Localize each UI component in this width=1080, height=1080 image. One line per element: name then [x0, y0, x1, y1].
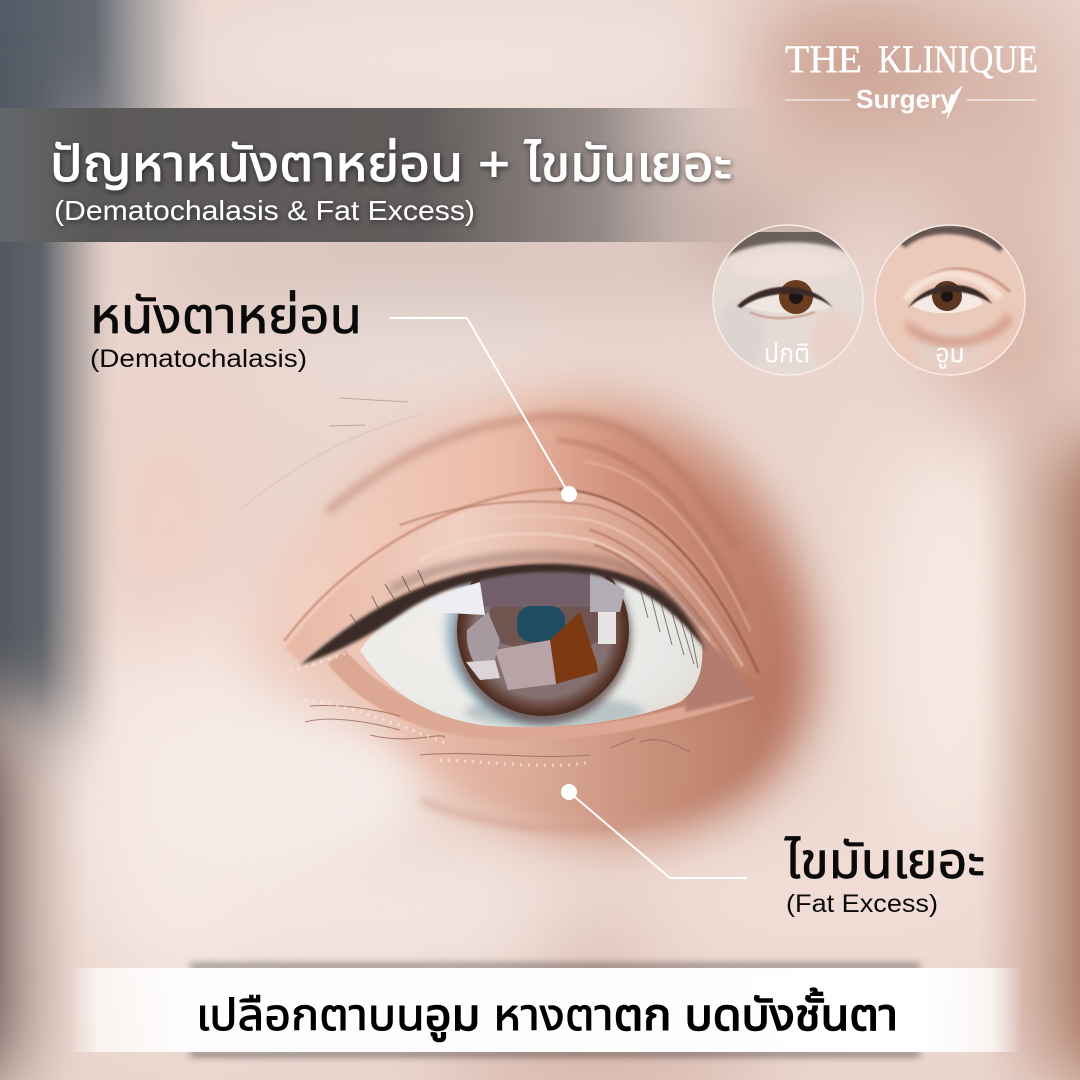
upper lash line [300, 564, 705, 665]
title band [0, 108, 770, 242]
circle: normal eye [713, 225, 863, 375]
brand logo: Surgery [856, 84, 956, 114]
brand logo: KLINIQUE [878, 38, 1038, 81]
drooping eyelid [285, 490, 756, 680]
label: dermatochalasis: หนังตาหย่อน [90, 288, 362, 344]
sclera [360, 565, 702, 727]
wrinkle lines on eyelid [240, 398, 758, 672]
label: fat excess: (Fat Excess) [786, 890, 938, 918]
lower lid rim [328, 650, 755, 740]
callout line: fat excess [561, 784, 747, 878]
bag crease [420, 800, 640, 829]
bottom summary band [70, 964, 1020, 1056]
brand logo [785, 38, 1038, 119]
main title: ปัญหาหนังตาหย่อน + ไขมันเยอะ [50, 136, 732, 192]
white skin speckles [290, 652, 590, 765]
label: baggy: อูม [936, 338, 964, 369]
summary text: เปลือกตาบน อูม หางตาตก บดบังชั้นตา [196, 988, 898, 1042]
caruncle [685, 625, 753, 712]
eye bag [340, 695, 765, 818]
main eye illustration [180, 392, 813, 860]
title subtitle: (Dematochalasis & Fat Excess) [54, 195, 475, 226]
iris and reflection [426, 564, 646, 727]
callout line: dermatochalasis [390, 318, 577, 502]
lower lid wrinkles [305, 705, 690, 756]
upper fold skin [290, 414, 770, 690]
soft lash shadow [390, 556, 700, 630]
soft rose halo around the eye [240, 392, 813, 839]
label: dermatochalasis: (Dematochalasis) [90, 345, 307, 373]
label: fat excess: ไขมันเยอะ [784, 833, 985, 889]
label: dermatochalasis [90, 288, 362, 373]
circle: baggy eye [875, 225, 1026, 376]
label: fat excess [784, 833, 985, 918]
lash strands [350, 570, 698, 668]
pale cheek highlight under eye [180, 720, 420, 860]
label: normal: ปกติ [764, 338, 810, 368]
brand logo: THE [785, 38, 862, 81]
